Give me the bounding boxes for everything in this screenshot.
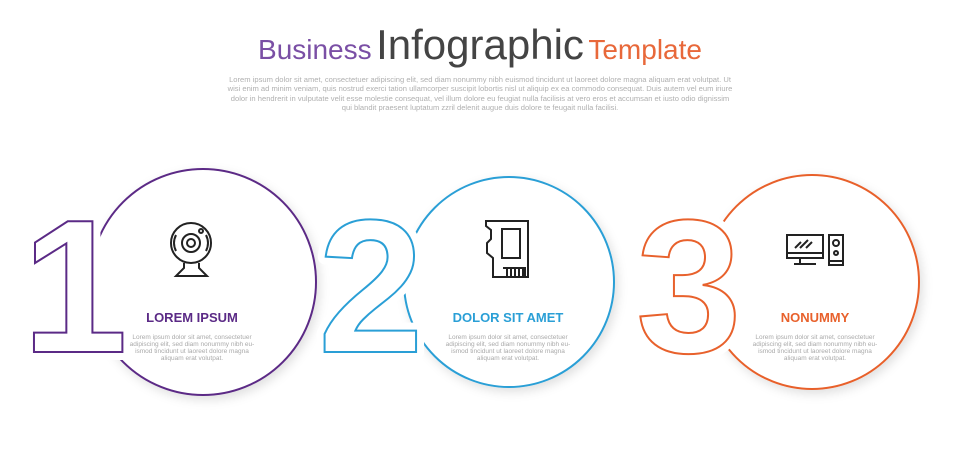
panel 3: 3 xyxy=(636,181,742,393)
panel 1: 1 xyxy=(22,181,128,393)
body text: aliquam erat volutpat. xyxy=(784,355,846,362)
body text: aliquam erat volutpat. xyxy=(477,355,539,362)
body text: Lorem ipsum dolor sit amet, consectetuer xyxy=(132,334,252,341)
heading: DOLOR SIT AMET xyxy=(453,310,563,325)
panel 2 xyxy=(318,177,614,393)
number 2: 2 xyxy=(318,181,424,393)
body text: aliquam erat volutpat. xyxy=(161,355,223,362)
icon: webcam xyxy=(171,223,211,276)
number 3: 3 xyxy=(636,181,742,393)
icon: desktop computer xyxy=(787,235,843,265)
icon: memory card xyxy=(486,221,528,277)
title: Business Infographic Template xyxy=(258,21,702,68)
body text: Lorem ipsum dolor sit amet, consectetuer xyxy=(448,334,568,341)
panel 2: 2 xyxy=(318,181,424,393)
body text: ismod tincidunt ut laoreet dolore magna xyxy=(758,348,872,355)
panel 3 xyxy=(636,175,919,393)
body text: adipiscing elit, sed diam nonummy nibh eu- xyxy=(753,341,877,348)
heading: LOREM IPSUM xyxy=(146,310,238,325)
body text xyxy=(446,334,570,362)
number 1: 1 xyxy=(22,181,128,393)
body text: ismod tincidunt ut laoreet dolore magna xyxy=(135,348,249,355)
body text xyxy=(130,334,254,362)
intro text: Lorem ipsum dolor sit amet, consectetuer adipiscing elit, sed diam nonummy nibh euismod tincidunt ut laoreet dolore magna aliquam erat volutpat. Ut wisi enim ad minim veniam, quis nostrud exerci tation ullamcorper suscipit lobortis nisl ut aliquip ex ea commodo consequat. Duis autem vel eum iriure dolor in hendrerit in vulputate velit esse molestie consequat, vel illum dolore eu feugiat nulla facilisis at vero eros et accumsan et iusto odio dignissim qui blandit praesent luptatum zzril delenit augue duis dolore te feugait nulla facilisi. xyxy=(228,75,732,112)
heading: NONUMMY xyxy=(781,310,850,325)
body text: ismod tincidunt ut laoreet dolore magna xyxy=(451,348,565,355)
body text: Lorem ipsum dolor sit amet, consectetuer xyxy=(755,334,875,341)
panel 1 xyxy=(22,169,316,395)
body text: adipiscing elit, sed diam nonummy nibh eu- xyxy=(446,341,570,348)
body text xyxy=(753,334,877,362)
body text: adipiscing elit, sed diam nonummy nibh eu- xyxy=(130,341,254,348)
